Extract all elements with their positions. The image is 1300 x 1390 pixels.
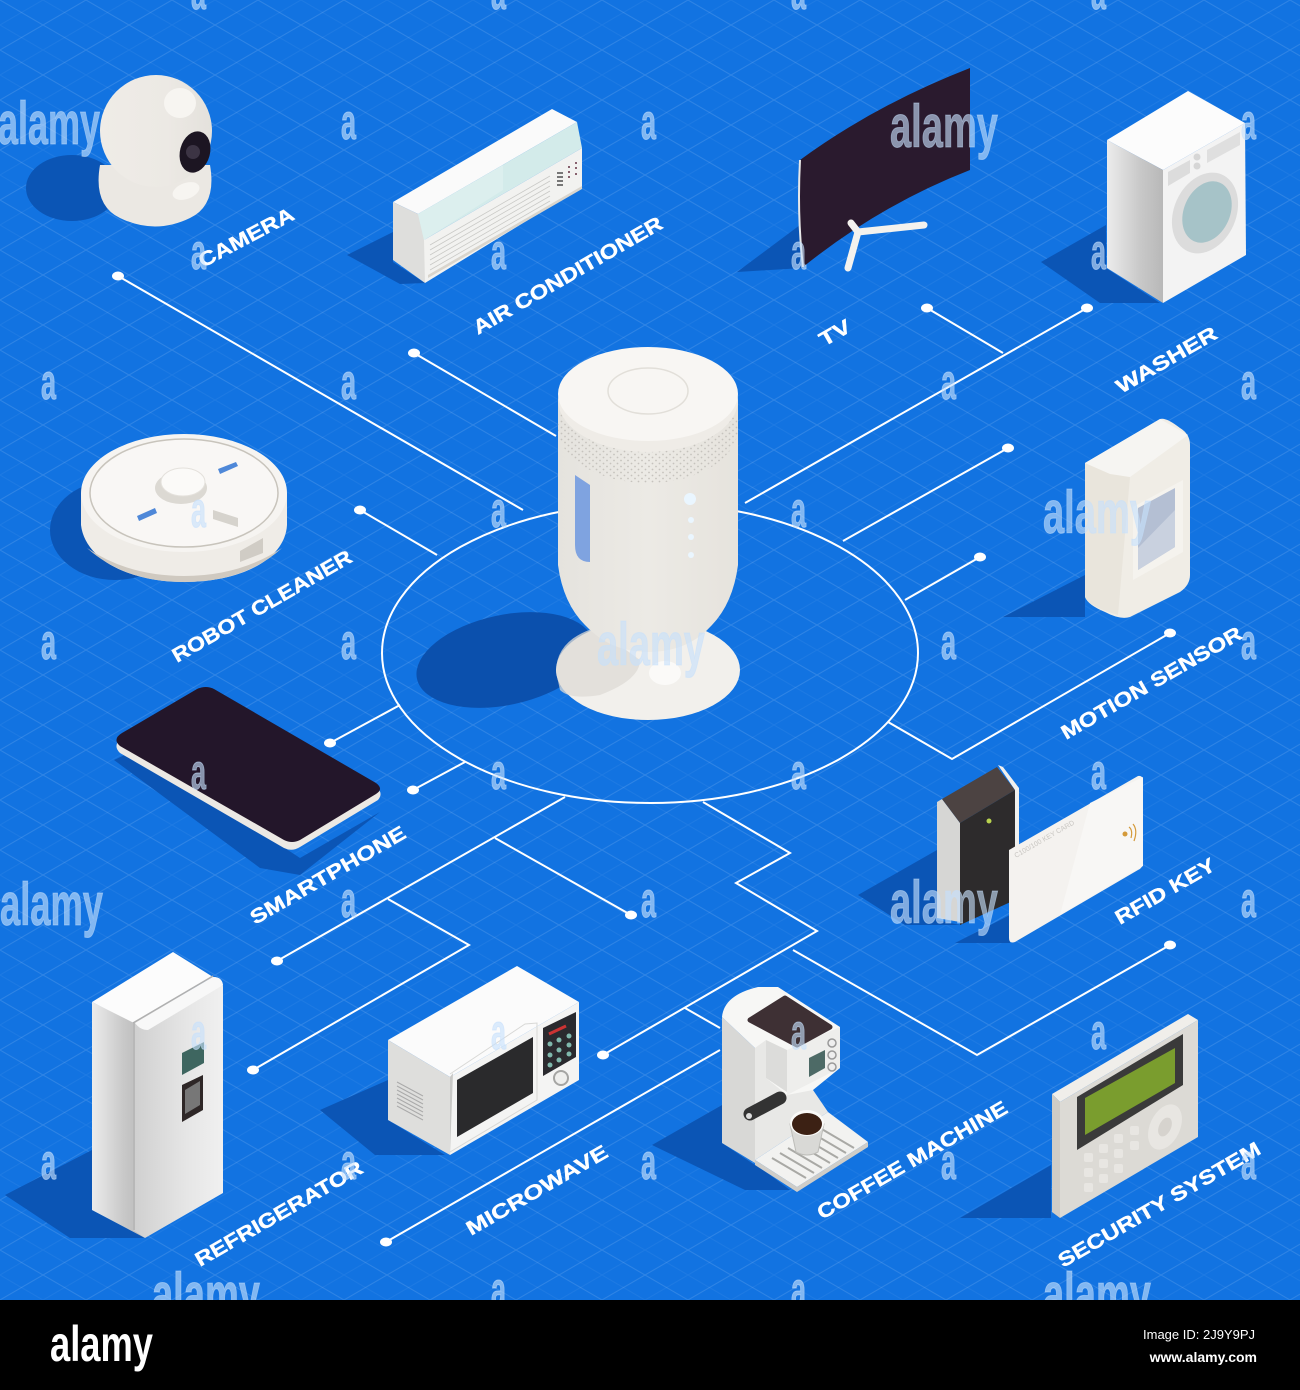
watermarks: a — [941, 354, 957, 410]
text labels: CAMERA — [195, 204, 298, 272]
watermarks: a — [491, 1004, 507, 1060]
watermarks: a — [941, 1134, 957, 1190]
watermarks: a — [341, 1134, 357, 1190]
device: security system — [960, 1014, 1198, 1218]
device: camera — [26, 75, 215, 226]
text labels — [168, 204, 1265, 1272]
watermarks: a — [491, 1262, 507, 1318]
watermarks: a — [491, 744, 507, 800]
watermarks: alamy — [890, 869, 998, 936]
device: microwave — [320, 966, 579, 1155]
watermarks: a — [641, 94, 657, 150]
footer bar — [0, 1300, 1300, 1390]
watermarks: a — [941, 614, 957, 670]
watermarks: a — [1241, 872, 1257, 928]
device: air conditioner — [347, 109, 582, 284]
watermarks: a — [1091, 224, 1107, 280]
watermarks: a — [791, 1004, 807, 1060]
text labels: COFFEE MACHINE — [814, 1097, 1012, 1224]
watermarks: a — [1091, 744, 1107, 800]
watermarks: a — [1241, 1134, 1257, 1190]
watermarks: a — [191, 482, 207, 538]
watermarks: a — [341, 94, 357, 150]
device: robot cleaner — [50, 434, 287, 582]
footer bar: Image ID: 2J9Y9PJ — [1143, 1327, 1255, 1342]
watermarks: a — [341, 872, 357, 928]
watermarks: alamy — [1043, 1261, 1151, 1328]
watermarks: alamy — [0, 90, 100, 157]
text labels: SECURITY SYSTEM — [1054, 1138, 1265, 1272]
watermarks: a — [1241, 614, 1257, 670]
watermarks: a — [491, 482, 507, 538]
text labels: MOTION SENSOR — [1058, 622, 1247, 744]
watermarks: a — [191, 744, 207, 800]
watermarks: a — [341, 354, 357, 410]
watermarks: a — [641, 1134, 657, 1190]
watermarks: a — [1091, 1004, 1107, 1060]
device: RFID key — [858, 765, 1143, 943]
text labels: REFRIGERATOR — [192, 1157, 368, 1271]
watermarks: a — [41, 614, 57, 670]
footer bar: www.alamy.com — [1149, 1349, 1257, 1365]
watermarks: a — [791, 744, 807, 800]
watermarks: a — [41, 1134, 57, 1190]
watermarks: a — [791, 482, 807, 538]
device: motion sensor — [1003, 419, 1190, 618]
watermarks: alamy — [1043, 479, 1151, 546]
watermarks: alamy — [597, 611, 705, 678]
device: coffee machine — [652, 987, 868, 1192]
watermarks: a — [1241, 94, 1257, 150]
text labels: WASHER — [1112, 322, 1222, 398]
device: TV — [737, 68, 970, 272]
watermarks: alamy — [890, 93, 998, 160]
watermarks: a — [791, 224, 807, 280]
device: smartphone — [114, 687, 381, 875]
watermarks: a — [191, 224, 207, 280]
device: central smart hub — [408, 347, 740, 723]
watermarks: a — [341, 614, 357, 670]
connector lines — [112, 272, 1176, 1246]
text labels: SMARTPHONE — [246, 822, 410, 929]
device: refrigerator — [5, 952, 223, 1238]
watermarks: a — [641, 872, 657, 928]
device: washer — [1041, 91, 1250, 303]
watermarks: a — [1241, 354, 1257, 410]
watermarks: alamy — [0, 871, 103, 938]
device: RFID key: C100/100 KEY CARD — [1014, 820, 1076, 860]
watermarks: a — [191, 1004, 207, 1060]
footer bar: alamy — [50, 1316, 153, 1372]
text labels: ROBOT CLEANER — [168, 546, 357, 667]
watermarks: a — [791, 1262, 807, 1318]
text labels: RFID KEY — [1112, 854, 1220, 929]
text labels: MICROWAVE — [462, 1141, 612, 1240]
watermarks: a — [41, 354, 57, 410]
text labels: AIR CONDITIONER — [470, 212, 667, 339]
text labels: TV — [816, 315, 856, 351]
watermarks: alamy — [152, 1261, 260, 1328]
watermarks: a — [491, 224, 507, 280]
